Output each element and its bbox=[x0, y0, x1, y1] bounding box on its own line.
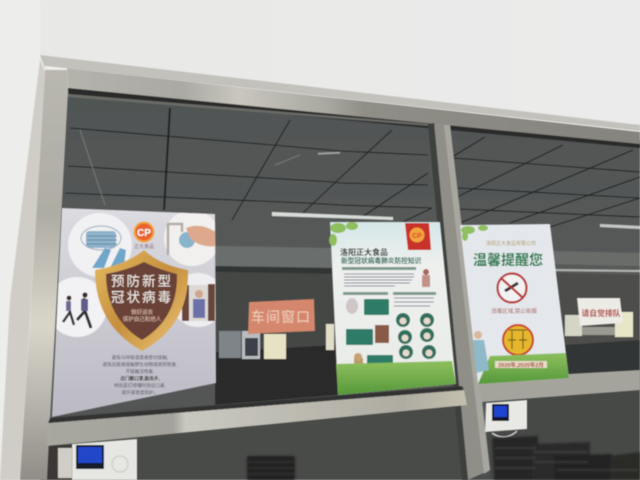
body text: 出门戴口罩,勤洗手, bbox=[120, 375, 160, 382]
poster title bbox=[340, 247, 422, 265]
top rail bbox=[67, 68, 640, 146]
sign: please queue: 请自觉排队 bbox=[582, 308, 621, 318]
poster artwork clipped to sheet bbox=[56, 212, 216, 338]
sign: workshop window bbox=[248, 299, 315, 334]
stacks of trays bbox=[247, 436, 640, 480]
body text: 避免近距离接触野生动物或病死牲畜, bbox=[103, 361, 177, 368]
company line: 洛阳正大食品有限公司 bbox=[486, 240, 536, 247]
poster title: 洛阳正大食品 bbox=[340, 247, 388, 257]
left post bbox=[20, 70, 68, 480]
slogan band: 2020年,2020年2月 bbox=[498, 361, 544, 369]
leaves decoration bbox=[461, 225, 488, 241]
icon: CP logo: CP bbox=[137, 228, 151, 239]
lower rail right bbox=[478, 370, 640, 402]
left column cards bbox=[343, 292, 393, 377]
body text bbox=[103, 354, 177, 396]
icon: person at window circle bbox=[178, 272, 216, 328]
lower panels bbox=[50, 405, 480, 480]
figure: person bbox=[473, 331, 489, 373]
shield with title: 预防新型 bbox=[111, 274, 173, 289]
sign: workshop window: 车间窗口 bbox=[251, 309, 311, 325]
icon: mask and gloves circle bbox=[68, 213, 132, 277]
reflected wall band bbox=[215, 246, 332, 268]
intro block bbox=[342, 267, 430, 287]
leaves decoration bbox=[329, 222, 358, 246]
body text: 避免与呼吸道患者密切接触, bbox=[112, 354, 168, 361]
poster title: 温馨提醒您 bbox=[473, 252, 543, 268]
grass strip bbox=[478, 353, 569, 384]
poster title: 新型冠状病毒肺炎防控知识 bbox=[341, 256, 422, 265]
poster: Luoyang CP Foods coronavirus knowledge bbox=[329, 222, 456, 395]
icon: no smoking bbox=[498, 274, 526, 302]
icon: CP logo bbox=[134, 222, 154, 250]
shield with title: 保护自己和他人 bbox=[123, 315, 162, 323]
centre post bbox=[434, 123, 490, 480]
icon: hand washing circle bbox=[164, 210, 220, 266]
red tab with CP logo bbox=[405, 223, 431, 250]
icon: CP logo: 正大食品 bbox=[134, 243, 154, 250]
grass strip bbox=[336, 361, 456, 395]
sign: please queue bbox=[577, 298, 623, 326]
icon: runners circle bbox=[56, 276, 106, 338]
no smoking text: 消毒区域,禁止吸烟 bbox=[491, 307, 537, 315]
body text: 提升紧密度防护。 bbox=[122, 389, 158, 396]
wall device left bbox=[72, 439, 137, 480]
shield with title: 做好送衣 bbox=[131, 308, 153, 316]
poster: warm reminder no smoking bbox=[460, 224, 569, 384]
red tab with CP logo: CP bbox=[412, 233, 422, 240]
shield with title bbox=[95, 250, 188, 351]
shield with title: 冠状病毒 bbox=[111, 290, 173, 305]
reflected light fixture bbox=[272, 212, 393, 220]
lower rail left bbox=[47, 390, 467, 446]
body text: 不接触活牲畜, bbox=[126, 368, 154, 375]
body text: 特别是打喷嚏时捂住口鼻, bbox=[114, 382, 166, 389]
wall device right bbox=[485, 400, 527, 437]
lower dark reflection bbox=[215, 272, 338, 405]
window area: reflected factory ceiling bbox=[40, 88, 640, 480]
poster: prevent novel coronavirus bbox=[47, 208, 225, 417]
slogan band bbox=[495, 361, 547, 369]
icon: yellow red circle bbox=[503, 325, 533, 355]
right column: hand washing steps bbox=[393, 292, 436, 359]
